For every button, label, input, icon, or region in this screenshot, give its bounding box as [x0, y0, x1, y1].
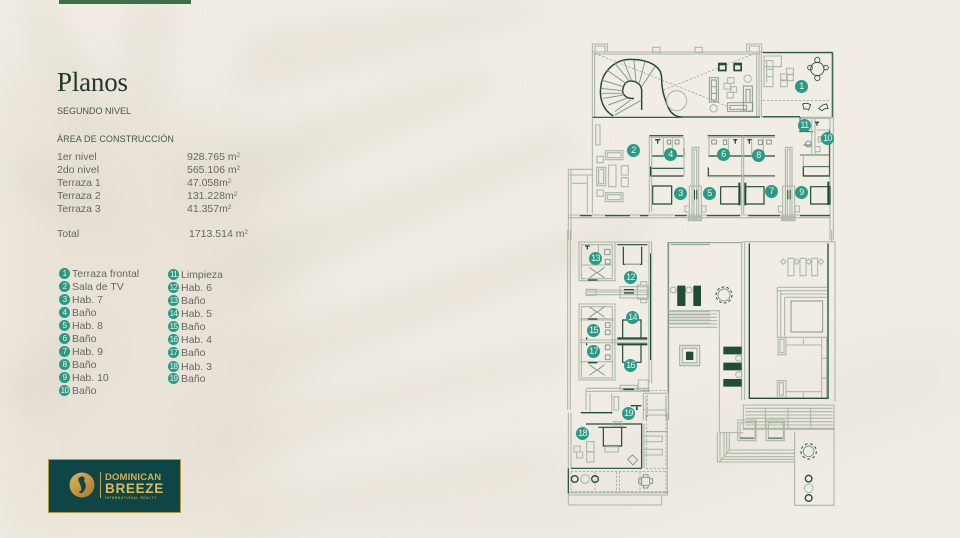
- item 4: 4: [63, 308, 66, 317]
- marker 12: 12: [626, 272, 635, 282]
- item 1: Terraza frontal: [72, 268, 139, 280]
- corridor wall: [568, 230, 570, 410]
- row: Terraza 2: Terraza 2: [57, 190, 101, 202]
- marker 10: 10: [823, 133, 832, 143]
- construction area table: [57, 134, 248, 240]
- item 6: 6: [63, 334, 66, 343]
- lower bedroom wing: [568, 413, 668, 505]
- item 1: 1: [63, 269, 66, 278]
- item 17: [168, 347, 206, 359]
- marker 18: 18: [578, 428, 587, 438]
- logo word BREEZE: BREEZE: [105, 481, 164, 496]
- item 7: 7: [63, 347, 66, 356]
- logo tagline: INTERNATIONAL REALTY: [105, 496, 157, 500]
- marker 3: 3: [678, 188, 683, 198]
- item 18: Hab. 3: [181, 361, 212, 373]
- item 15: Baño: [181, 321, 206, 333]
- item 2: Sala de TV: [72, 281, 124, 293]
- logo word DOMINICAN: DOMINICAN: [105, 472, 161, 483]
- marker 9: [795, 186, 808, 199]
- item 8: 8: [63, 360, 66, 369]
- marker 1: [795, 80, 808, 93]
- marker 14: 14: [628, 312, 637, 322]
- item 15: 15: [170, 322, 177, 331]
- row: Terraza 1: 47.058m2: [187, 177, 231, 189]
- room partition: [586, 282, 648, 303]
- row: 2do nivel: 565.106 m2: [187, 164, 240, 176]
- terrace walls: [668, 230, 835, 433]
- item 17: Baño: [181, 347, 206, 359]
- bath 15 and 17 block: [579, 304, 647, 380]
- logo divider: [100, 472, 101, 498]
- corridor bridges: [685, 147, 799, 221]
- marker 11: 11: [800, 120, 809, 130]
- table heading: ÁREA DE CONSTRUCCIÓN: [57, 134, 174, 144]
- item 19: [168, 373, 206, 385]
- item 5: 5: [63, 321, 66, 330]
- marker 4: [664, 148, 677, 161]
- pool loungers: [781, 258, 824, 276]
- row: 2do nivel: 2do nivel: [57, 164, 99, 176]
- item 12: Hab. 6: [181, 282, 212, 294]
- marker 8: 8: [756, 150, 761, 160]
- row: 1er nivel: [57, 151, 240, 163]
- marker 19: 19: [624, 408, 633, 418]
- marker 5: 5: [707, 188, 712, 198]
- terrace furniture: [764, 56, 828, 111]
- room 18 walls: [568, 413, 668, 505]
- marker 7: [765, 185, 778, 198]
- marker 18: [576, 427, 589, 440]
- marker 8: [752, 149, 765, 162]
- row: Total: Total: [57, 228, 79, 240]
- lower partition: [581, 380, 669, 420]
- bath 13 block: [579, 242, 615, 281]
- marker 17: 17: [589, 346, 598, 356]
- TV room furniture: [667, 63, 753, 112]
- item 16: Hab. 4: [181, 334, 212, 346]
- item 8: Baño: [72, 359, 97, 371]
- lower terrace: [795, 430, 834, 505]
- item 15: [168, 321, 206, 333]
- marker 6: [717, 148, 730, 161]
- row: Terraza 3: [57, 203, 231, 215]
- item 13: [168, 295, 206, 307]
- service rooms 10 and 11: [799, 117, 830, 177]
- marker 12: [624, 271, 637, 284]
- marker 16: [624, 359, 637, 372]
- item 19: 19: [170, 374, 177, 383]
- legend: room list column 2: [168, 269, 223, 385]
- marker 10: [821, 132, 834, 145]
- item 6: [59, 333, 97, 345]
- bedroom block 9: [803, 167, 830, 205]
- marker 2: 2: [631, 145, 636, 155]
- outer walls: [568, 44, 833, 240]
- marker 16: 16: [626, 360, 635, 370]
- dashed void lines: [595, 53, 830, 106]
- row: 2do nivel: [57, 164, 240, 176]
- item 11: 11: [170, 270, 177, 279]
- item 14: 14: [170, 309, 177, 318]
- beds 14 and 16: [617, 320, 647, 362]
- icon: seahorse medallion: [70, 472, 94, 498]
- lower steps: [717, 405, 835, 462]
- marker 1: 1: [799, 81, 804, 91]
- item 3: Hab. 7: [72, 294, 103, 306]
- fountain: [680, 346, 700, 366]
- marker 13: [589, 252, 602, 265]
- item 9: Hab. 10: [72, 372, 109, 384]
- marker 6: 6: [721, 149, 726, 159]
- top green bar: [59, 0, 191, 4]
- item 9: 9: [63, 373, 66, 382]
- row: Terraza 3: 41.357m2: [187, 203, 231, 215]
- room 12: [615, 242, 652, 383]
- row: Total: [57, 228, 248, 240]
- item 16: 16: [170, 335, 177, 344]
- marker 11: [798, 119, 811, 132]
- row: Terraza 2: 131.228m2: [187, 190, 237, 202]
- bedroom block 3 and 4: [649, 136, 685, 213]
- legend: room list column 1: [59, 268, 139, 397]
- item 3: 3: [63, 295, 66, 304]
- marker 17: [587, 345, 600, 358]
- row: Terraza 1: Terraza 1: [57, 177, 101, 189]
- subtitle: SEGUNDO NIVEL: [57, 106, 131, 116]
- upper wing: [568, 44, 833, 240]
- item 4: Baño: [72, 307, 97, 319]
- item 17: 17: [170, 348, 177, 357]
- marker 3: [674, 187, 687, 200]
- item 13: 13: [170, 296, 177, 305]
- item 12: 12: [170, 283, 177, 292]
- bedroom block 5 6 7 8: [708, 136, 775, 214]
- row: 1er nivel: 1er nivel: [57, 151, 97, 163]
- item 19: Baño: [181, 373, 206, 385]
- right wing: pool terrace: [668, 230, 835, 505]
- item 5: Hab. 8: [72, 320, 103, 332]
- row: Terraza 2: [57, 190, 237, 202]
- marker 13: 13: [591, 253, 600, 263]
- item 13: Baño: [181, 295, 206, 307]
- right bath strip: [644, 413, 667, 495]
- item 10: Baño: [72, 385, 97, 397]
- spiral staircase: [600, 59, 682, 117]
- row: Terraza 1: [57, 177, 231, 189]
- row: Terraza 3: Terraza 3: [57, 203, 101, 215]
- marker 14: [626, 311, 639, 324]
- pool frame: [749, 243, 835, 398]
- item 6: Baño: [72, 333, 97, 345]
- marker 15: 15: [589, 325, 598, 335]
- deck loungers: [670, 286, 742, 387]
- row: 1er nivel: 928.765 m2: [187, 151, 240, 163]
- logo: Dominican Breeze: [48, 459, 181, 513]
- marker 5: [703, 187, 716, 200]
- marker 4: 4: [668, 149, 673, 159]
- item 14: Hab. 5: [181, 308, 212, 320]
- item 10: 10: [61, 386, 68, 395]
- marker 7: 7: [769, 186, 774, 196]
- item 18: 18: [170, 362, 177, 371]
- marker 15: [587, 324, 600, 337]
- item 11: Limpieza: [181, 269, 223, 281]
- courtyard edge and loungers: [667, 243, 710, 420]
- item 7: Hab. 9: [72, 346, 103, 358]
- title: Planos: [57, 67, 128, 97]
- marker 2: [627, 144, 640, 157]
- marker 9: 9: [799, 187, 804, 197]
- row: Total: 1713.514 m2: [189, 228, 248, 240]
- item 10: [59, 385, 97, 397]
- sala sofas: [597, 151, 628, 202]
- item 2: 2: [63, 282, 66, 291]
- room 18 furniture: [574, 442, 638, 465]
- left wing: [568, 230, 710, 420]
- item 8: [59, 359, 97, 371]
- marker 19: [622, 407, 635, 420]
- terrace 3: [568, 468, 668, 493]
- item 4: [59, 307, 97, 319]
